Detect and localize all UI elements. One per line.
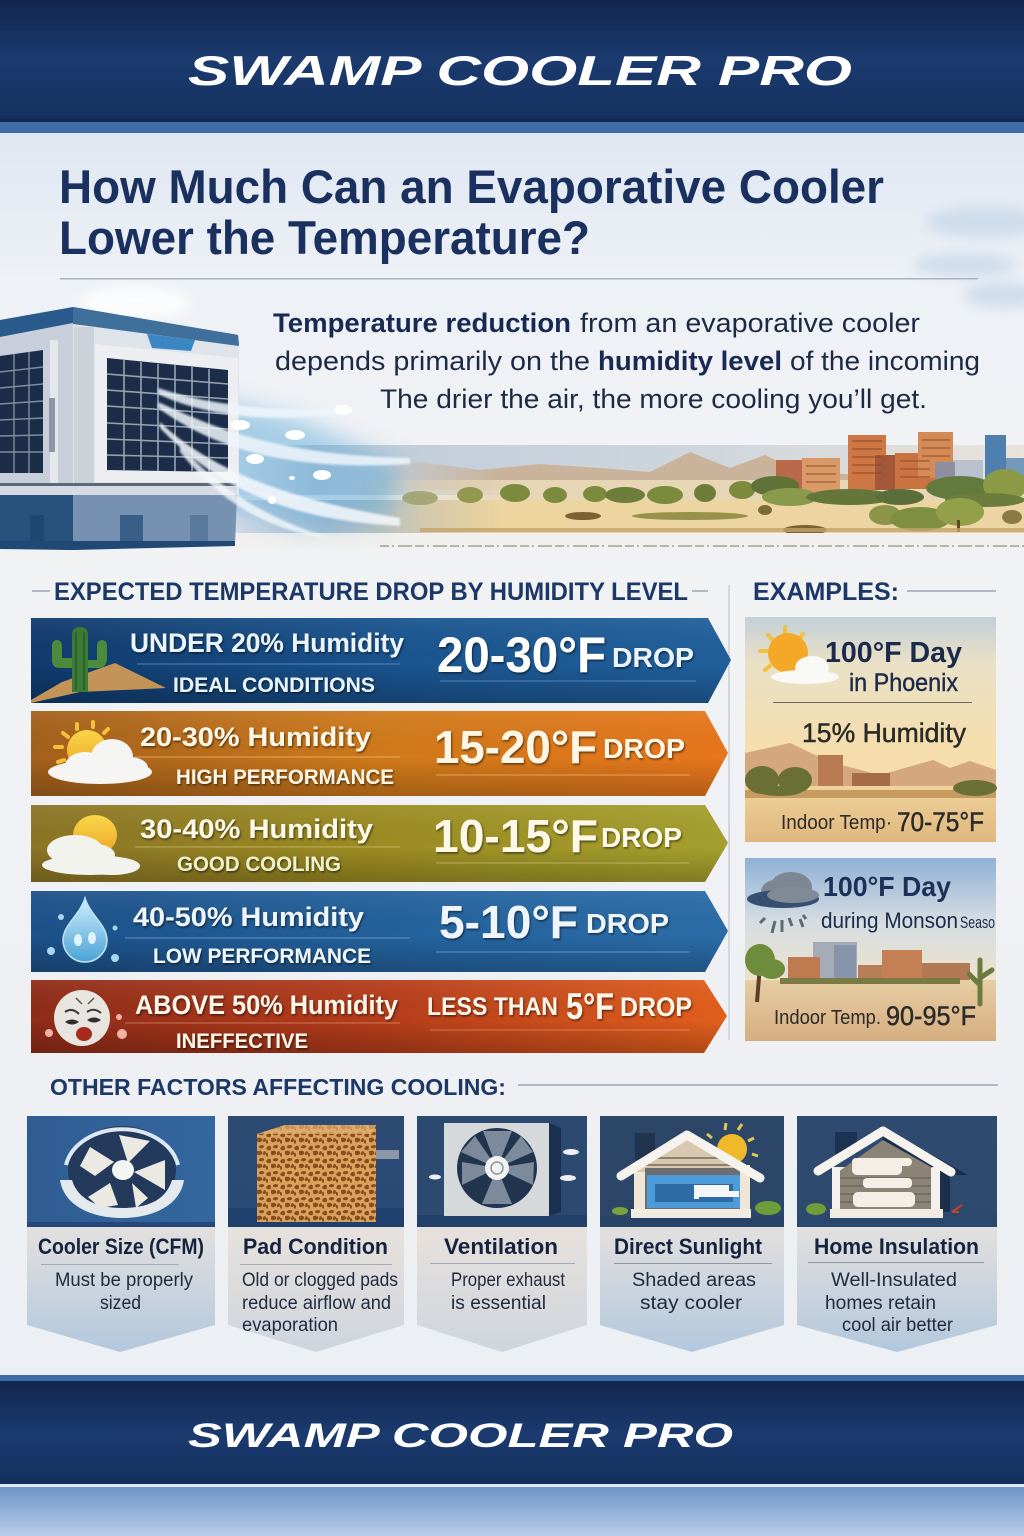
bar text: INEFFECTIVE [176, 1030, 308, 1053]
card description: Old or clogged pads [242, 1270, 398, 1291]
tree line [402, 469, 1024, 507]
cool air streams and droplets [158, 388, 410, 538]
card description: Shaded areas [632, 1270, 756, 1291]
footer brand name: SWAMP COOLER PRO [188, 1417, 733, 1455]
evaporative cooler unit [0, 307, 239, 550]
bar text: IDEAL CONDITIONS [173, 674, 375, 697]
factor card: pad condition [228, 1116, 404, 1352]
example card: Phoenix [745, 617, 997, 842]
main title: Lower the Temperature? [59, 211, 590, 264]
intro paragraph [273, 308, 980, 414]
icon: sun behind cloud [48, 722, 152, 784]
bottom footer banner [0, 1375, 1024, 1536]
card description: cool air better [842, 1315, 954, 1336]
main title [59, 160, 884, 264]
factor card: home insulation [797, 1116, 997, 1352]
example card: monsoon [745, 858, 996, 1041]
card text: Seaso [960, 913, 995, 932]
icon: water drop [47, 898, 119, 962]
card text: 100°F Day [825, 637, 962, 669]
section heading: examples: EXAMPLES: [753, 578, 899, 606]
card label: Pad Condition [243, 1234, 388, 1259]
card description [55, 1270, 193, 1314]
bar text [130, 627, 694, 697]
icon: fan [60, 1126, 184, 1218]
humidity bar: under 20% [31, 618, 731, 703]
top header banner [0, 0, 1024, 133]
bar text: 30-40% Humidity [140, 814, 373, 844]
card text: 70-75°F [897, 807, 984, 837]
city scene [745, 942, 996, 1041]
card description: evaporation [242, 1315, 338, 1336]
icon: sun and cloud [760, 627, 839, 684]
card text: 15% Humidity [802, 718, 966, 748]
icon: cooling pad block [257, 1125, 376, 1222]
icon: house with sun [612, 1123, 781, 1218]
bar text: 20-30°F [437, 627, 606, 683]
bar text [135, 986, 692, 1053]
card description: is essential [451, 1293, 546, 1314]
icon: house with insulation [806, 1127, 968, 1218]
card text: 90-95°F [886, 1001, 976, 1031]
bar text: DROP [620, 992, 692, 1022]
card description [242, 1270, 398, 1336]
air stream glow [160, 385, 400, 528]
card text: Indoor Temp. [774, 1007, 881, 1029]
intro paragraph: Temperature reduction [273, 308, 571, 338]
card description: stay cooler [640, 1293, 743, 1314]
main title: How Much Can an Evaporative Cooler [59, 160, 884, 213]
bar text [140, 810, 682, 876]
intro paragraph: from an evaporative cooler [580, 308, 920, 338]
bar text: LESS THAN [427, 993, 558, 1021]
bar text: 5°F [566, 986, 614, 1027]
bar text: 20-30% Humidity [140, 722, 371, 752]
icon: rain cloud [747, 872, 819, 933]
humidity bar: 20-30% [31, 711, 728, 796]
humidity bar: 40-50% [31, 891, 728, 972]
card description [451, 1270, 566, 1314]
desert and city landscape [235, 432, 1024, 548]
card label: Ventilation [444, 1234, 558, 1259]
factor card: cooler size [27, 1116, 215, 1352]
intro paragraph: of the incoming [790, 346, 980, 376]
bar text: GOOD COOLING [177, 853, 341, 876]
cooler base [0, 495, 237, 550]
section heading: other factors: OTHER FACTORS AFFECTING COOLING: [50, 1074, 506, 1100]
card label: Cooler Size (CFM) [38, 1234, 204, 1259]
card description [632, 1270, 756, 1314]
card description: Must be properly [55, 1270, 193, 1291]
bar text: DROP [601, 822, 682, 853]
card text: during Monson [821, 908, 958, 933]
bar text: LOW PERFORMANCE [153, 945, 371, 968]
section heading: temperature drop: EXPECTED TEMPERATURE DROP BY HUMIDITY LEVEL [54, 578, 688, 606]
cooler left grille [0, 350, 43, 473]
bar text: 5-10°F [439, 896, 578, 948]
bar text: UNDER 20% Humidity [130, 628, 404, 658]
card description: reduce airflow and [242, 1293, 391, 1314]
bar text [133, 896, 669, 968]
bar text: DROP [612, 642, 694, 673]
bar text [140, 721, 685, 789]
card description: homes retain [825, 1293, 936, 1314]
desert scrub [420, 498, 1024, 535]
bar text: 10-15°F [433, 810, 598, 862]
bar text: DROP [603, 733, 685, 764]
card text: in Phoenix [849, 669, 958, 697]
card label: Direct Sunlight [614, 1234, 763, 1259]
icon: unhappy face [45, 990, 127, 1046]
card text [773, 637, 984, 837]
card text: 100°F Day [823, 871, 951, 902]
bar text: ABOVE 50% Humidity [135, 990, 398, 1020]
card description: Well-Insulated [831, 1270, 957, 1291]
icon: exhaust fan panel [429, 1123, 579, 1216]
bar text: 15-20°F [434, 721, 597, 773]
card text [774, 871, 995, 1031]
cooler body [0, 323, 239, 495]
humidity bar: above 50% [31, 980, 727, 1053]
card description [825, 1270, 957, 1336]
icon: cactus on sand [31, 627, 166, 703]
intro paragraph: humidity level [598, 346, 782, 376]
humidity bar: 30-40% [31, 805, 728, 882]
factor card: direct sunlight [600, 1116, 784, 1352]
header brand name: SWAMP COOLER PRO [188, 47, 852, 94]
intro paragraph: The drier the air, the more cooling you’ll get. [380, 384, 927, 414]
icon: cloud over sun [42, 815, 140, 875]
intro paragraph: depends primarily on the [275, 346, 590, 376]
background clouds [80, 206, 1024, 319]
card description: Proper exhaust [451, 1270, 566, 1291]
cooler roof [0, 307, 239, 351]
desert scene [745, 743, 997, 842]
bar text: HIGH PERFORMANCE [176, 766, 394, 789]
cooler right grille [107, 358, 228, 472]
bar text: 40-50% Humidity [133, 902, 364, 932]
factor card: ventilation [417, 1116, 587, 1352]
card text: Indoor Temp· [781, 812, 892, 834]
bar text: DROP [586, 908, 669, 939]
card description: sized [100, 1293, 141, 1314]
card label: Home Insulation [814, 1234, 979, 1259]
city skyline [776, 432, 1024, 492]
